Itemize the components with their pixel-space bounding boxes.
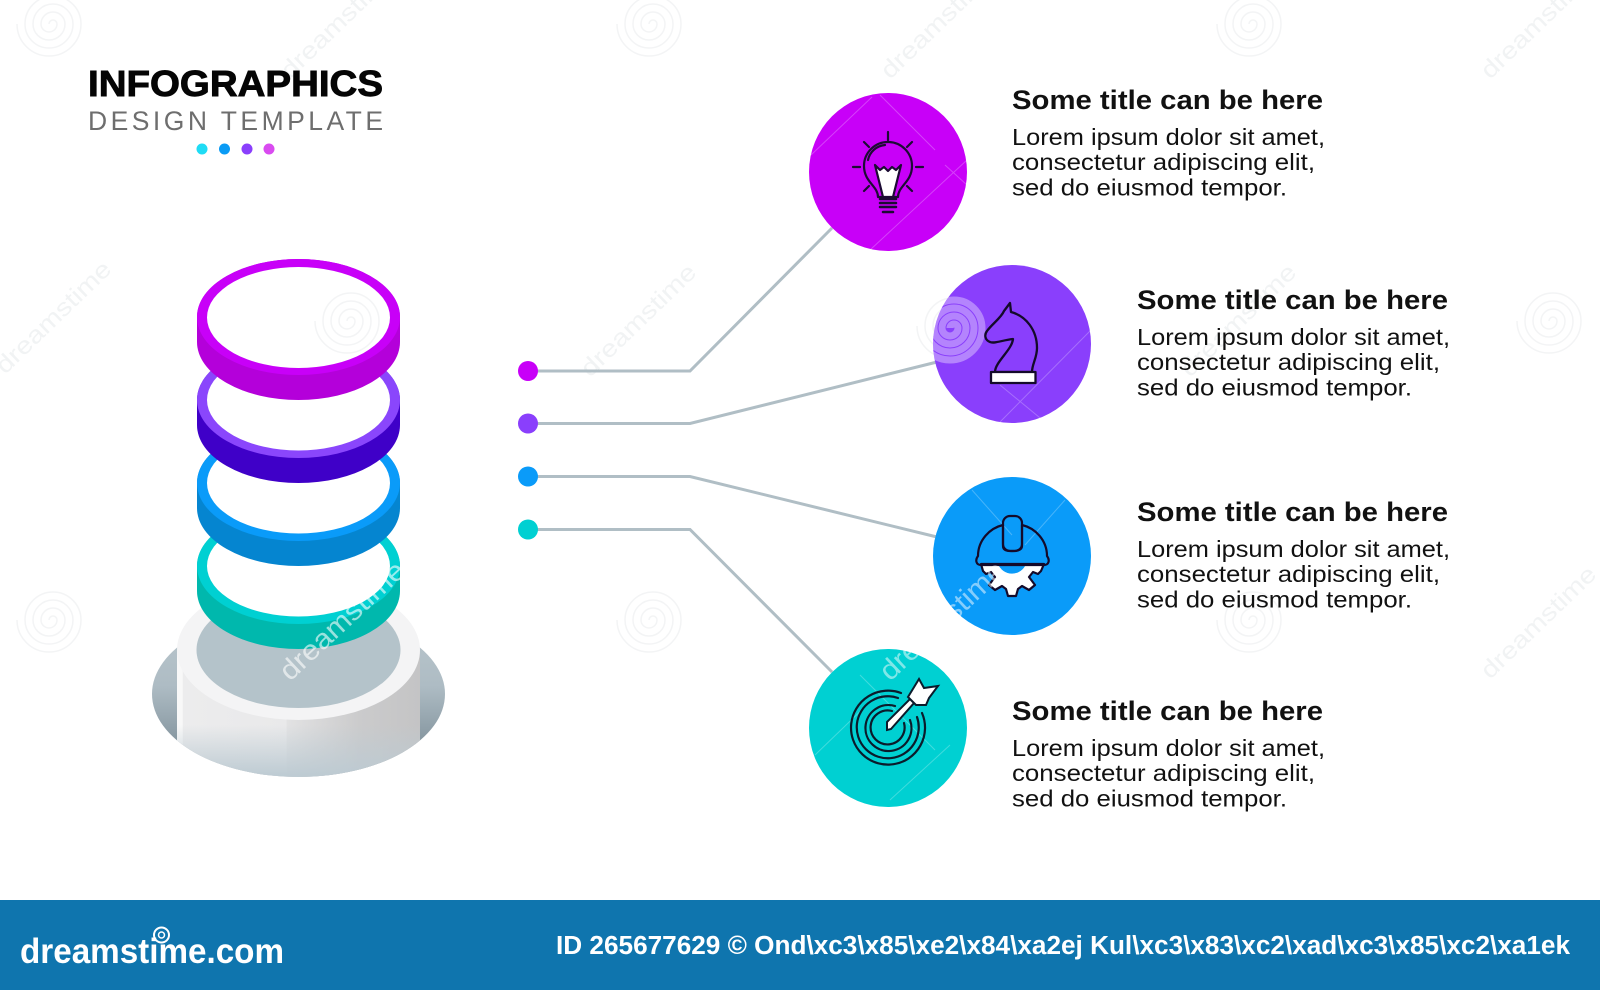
footer logo: dreamstime.com xyxy=(20,932,284,971)
circle: blue with helmet xyxy=(933,477,1091,635)
heading 3: Some title can be here xyxy=(1137,497,1448,527)
ring: blue xyxy=(197,425,400,566)
body 2: Lorem ipsum dolor sit amet, xyxy=(1137,324,1450,350)
text block 1 xyxy=(1012,85,1325,200)
ring: magenta xyxy=(197,259,400,400)
body 3 xyxy=(1137,536,1450,612)
ring: teal xyxy=(197,508,400,649)
footer credit: ID 265677629 © Ond\xc3\x85\xe2\x84\xa2ej Kul\xc3\x83\xc2\xad\xc3\x85\xc2\xa1ek xyxy=(556,932,1571,960)
body 4: consectetur adipiscing elit, xyxy=(1012,760,1315,786)
circle: magenta with bulb xyxy=(809,93,967,251)
body 2: consectetur adipiscing elit, xyxy=(1137,349,1440,375)
text block 4 xyxy=(1012,696,1325,812)
footer banner xyxy=(0,900,1600,990)
ring: purple xyxy=(197,342,400,483)
heading 1: Some title can be here xyxy=(1012,85,1323,115)
platform base xyxy=(152,608,445,777)
connector dots xyxy=(518,361,538,540)
circle: teal with target xyxy=(809,649,967,807)
body 3: consectetur adipiscing elit, xyxy=(1137,561,1440,587)
heading 2: Some title can be here xyxy=(1137,285,1448,315)
body 4: Lorem ipsum dolor sit amet, xyxy=(1012,735,1325,761)
text block 2 xyxy=(1137,285,1450,400)
watermark text: dreamstime xyxy=(1175,259,1302,382)
watermark spiral on circle xyxy=(918,300,982,360)
watermark spirals xyxy=(17,0,1581,652)
body 1: consectetur adipiscing elit, xyxy=(1012,149,1315,175)
title: INFOGRAPHICS xyxy=(88,63,383,104)
body 1: sed do eiusmod tempor. xyxy=(1012,174,1287,200)
heading 4: Some title can be here xyxy=(1012,696,1323,726)
title dots xyxy=(196,144,274,154)
icon: light bulb xyxy=(853,132,923,212)
icon: target with arrow xyxy=(851,679,938,765)
icon: helmet and gear xyxy=(976,516,1049,596)
watermark text on circles: dreamstime xyxy=(873,555,1011,686)
body 1: Lorem ipsum dolor sit amet, xyxy=(1012,124,1325,150)
text block 3 xyxy=(1137,497,1450,612)
title block xyxy=(88,63,383,154)
body 3: Lorem ipsum dolor sit amet, xyxy=(1137,536,1450,562)
body 2: sed do eiusmod tempor. xyxy=(1137,374,1412,400)
body 4 xyxy=(1012,735,1325,812)
connector lines xyxy=(528,228,937,672)
body 3: sed do eiusmod tempor. xyxy=(1137,586,1412,612)
stacked cylinder diagram xyxy=(152,259,445,780)
body 1 xyxy=(1012,124,1325,200)
watermark text: dreamstime xyxy=(1475,561,1600,684)
subtitle: DESIGN TEMPLATE xyxy=(88,106,383,136)
body 2 xyxy=(1137,324,1450,400)
circle: purple with knight xyxy=(918,265,1091,423)
watermark text xyxy=(0,0,1600,684)
watermark text on stack: dreamstime xyxy=(273,555,411,686)
body 4: sed do eiusmod tempor. xyxy=(1012,786,1287,812)
watermark text: dreamstime xyxy=(575,259,702,382)
icon: chess knight xyxy=(985,303,1037,383)
